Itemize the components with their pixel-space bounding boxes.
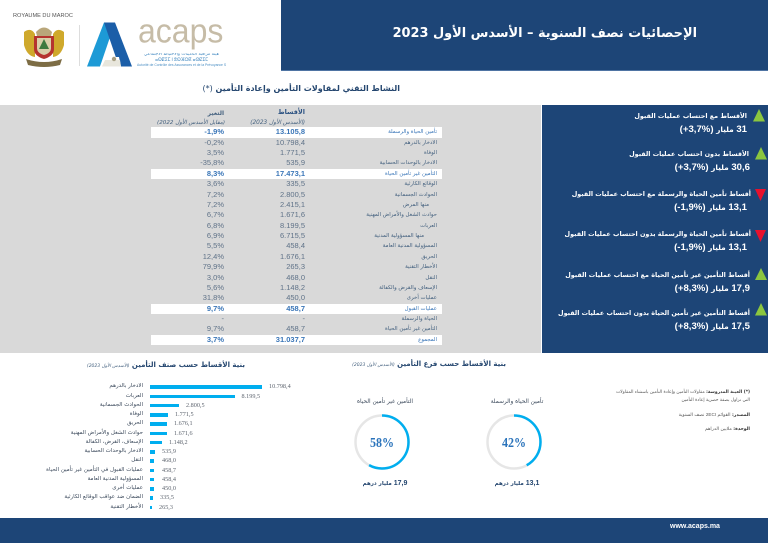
row: vehicles: 8.199,5 [280, 221, 305, 230]
bar: vehicles: العربات [126, 393, 143, 399]
row: life acceptances [222, 314, 437, 323]
bar: vehicles [0, 392, 300, 401]
key figure 5 text: أقساط التأمين غير تأمين الحياة مع احتساب عمليات القبول [565, 271, 750, 279]
key figure 2 text: الأقساط بدون احتساب عمليات القبول [629, 150, 749, 158]
note: sample: (*) العينة المدروسة: مقاولات التأمين وإعادة التأمين باستثناء المقاولات التي تزاول بصفة حصرية إعادة التأمين [616, 390, 750, 402]
row: other [203, 293, 437, 302]
key figure 5 value: 17,9 مليار (+8,3%) [675, 283, 750, 294]
bar: transport: النقل [131, 457, 143, 463]
row: acceptances: 9,7% [207, 304, 224, 313]
icon: royal emblem [24, 28, 64, 67]
key figure 1 [634, 109, 765, 135]
row: bodily accidents: 7,2% [207, 190, 224, 199]
row: death: الوفاة [424, 150, 437, 156]
row: of which illness: 2.415,1 [280, 200, 305, 209]
row: catastrophe: 335,5 [286, 179, 305, 188]
bar: bodily accidents: الحوادث الجسمانية [100, 402, 143, 408]
row: work accidents: حوادث الشغل والأمراض المهنية [366, 212, 437, 218]
bar: dirham savings: 10.798,4 [269, 383, 291, 390]
row: unit savings: -35,8% [200, 158, 224, 167]
row: assistance credit surety [207, 283, 437, 292]
donut value: life: 13,1 مليار درهم [495, 480, 539, 487]
key figure 2 [629, 147, 767, 173]
footer website: www.acaps.ma [670, 523, 720, 530]
row: life insurance: 13.105,8 [276, 127, 305, 136]
bar: assistance credit surety [0, 438, 300, 447]
row: total [0, 335, 541, 345]
row: life acceptances: - [302, 314, 305, 323]
bar: catastrophe: 335,5 [160, 494, 174, 501]
row: other: 450,0 [286, 293, 305, 302]
row: catastrophe: الوقائع الكارثية [404, 181, 437, 187]
row: of which illness: 7,2% [207, 200, 224, 209]
row: work accidents [207, 210, 437, 219]
row: catastrophe: 3,6% [207, 179, 224, 188]
bar: fire: 1.676,1 [174, 420, 193, 427]
row: non-life acceptances: 458,7 [286, 324, 305, 333]
icon: acaps logo A [87, 22, 132, 66]
row: non-life acceptances: التأمين غير تأمين الحياة [385, 326, 437, 332]
row: transport: 468,0 [286, 273, 305, 282]
bar: catastrophe: الضمان ضد عواقب الوقائع الكارثية [64, 494, 143, 500]
row: general liability: المسؤولية المدنية العامة [383, 243, 437, 249]
bar: other [0, 484, 300, 493]
note: unit: الوحدة: ملايين الدراهم [705, 426, 750, 432]
row: vehicles [207, 221, 437, 230]
row: other: عمليات أخرى [407, 295, 437, 301]
column header: change: التغير [208, 110, 224, 117]
row: vehicles: العربات [420, 223, 437, 229]
donut chart: life 42% [484, 412, 544, 472]
key figure 5 [565, 268, 767, 294]
bar: transport: 468,0 [162, 457, 176, 464]
bar: unit savings: الادخار بالوحدات الحسابية [84, 448, 143, 454]
key figure 3 [572, 189, 766, 213]
row: savings: -0,2% [204, 138, 224, 147]
bar: death: الوفاة [130, 411, 143, 417]
row: total: 31.037,7 [276, 335, 305, 344]
key figure 6 value: 17,5 مليار (+8,3%) [675, 321, 750, 332]
row: death [207, 148, 437, 157]
bar: catastrophe [0, 493, 300, 503]
column subheader: change period: (مقابل الأسدس الأول 2022) [157, 120, 225, 126]
row: life acceptances: - [222, 314, 224, 323]
bar: death [0, 410, 300, 419]
row: non-life: 17.473,1 [276, 169, 305, 178]
bar: other: عمليات أخرى [112, 485, 143, 491]
bar: general liability [0, 475, 300, 484]
row: life insurance: تأمين الحياة والرسملة [388, 129, 437, 135]
row: non-life acceptances: 9,7% [207, 324, 224, 333]
row: of which illness [207, 200, 429, 209]
row: technical risks: الأخطار التقنية [405, 264, 437, 270]
bar: death: 1.771,5 [175, 411, 194, 418]
row: bodily accidents: الحوادث الجسمانية [395, 192, 437, 198]
bar: transport [0, 456, 300, 466]
row: total: 3,7% [207, 335, 224, 344]
column subheader: premiums period: (الأسدس الأول 2023) [250, 120, 305, 126]
row: of which civil liability: منها المسؤولية المدنية [374, 233, 424, 239]
row: unit savings: الادخار بالوحدات الحسابية [380, 160, 437, 166]
icon: down arrow [755, 230, 766, 242]
row: fire: الحريق [421, 254, 437, 260]
bar: acceptances: 458,7 [162, 467, 176, 474]
row: acceptances: عمليات القبول [405, 306, 437, 312]
donut chart: non-life 58%: 58% [370, 436, 394, 451]
row: unit savings [200, 158, 437, 167]
row: assistance credit surety: 1.148,2 [280, 283, 305, 292]
header band [281, 0, 768, 71]
icon: up arrow [755, 268, 767, 280]
row: acceptances [0, 304, 541, 314]
row: unit savings: 535,9 [286, 158, 305, 167]
key figure 3 value: 13,1 مليار (-1,9%) [674, 202, 747, 213]
bar: fire [0, 419, 300, 429]
row: of which civil liability [207, 231, 424, 240]
bar: assistance credit surety: الإسعاف، القرض، الكفالة [86, 439, 143, 445]
row: transport: 3,0% [207, 273, 224, 282]
key figure 4 [564, 230, 766, 253]
row: of which illness: منها المرض [403, 202, 429, 208]
logo wordmark: acaps [138, 11, 223, 49]
bar: acceptances [0, 466, 300, 475]
row: of which civil liability: 6.715,5 [280, 231, 305, 240]
bar: technical risks: الأخطار التقنية [110, 504, 143, 510]
row: bodily accidents [207, 190, 437, 199]
row: savings [204, 138, 437, 147]
icon: up arrow [753, 109, 765, 122]
row: death: 1.771,5 [280, 148, 305, 157]
row: life insurance: -1,9% [204, 127, 224, 136]
panel: key figures [542, 105, 768, 353]
row: bodily accidents: 2.800,5 [280, 190, 305, 199]
bar: assistance credit surety: 1.148,2 [169, 439, 188, 446]
bar: work accidents: 1.671,6 [174, 430, 193, 437]
divider [78, 25, 80, 66]
row: technical risks: 79,9% [203, 262, 224, 271]
logo subtitle: ⴰⵙⵇⵉⵎ ⵏ ⵓⵙⴼⵔⴽ ⴰⵙⵇⵉⵎ [155, 56, 208, 62]
row: of which civil liability: 6,9% [207, 231, 224, 240]
footer band [0, 518, 768, 543]
row: work accidents: 1.671,6 [280, 210, 305, 219]
donut label: non-life: التأمين غير تأمين الحياة [357, 399, 413, 405]
kingdom label: ROYAUME DU MAROC [13, 13, 73, 19]
heading: structure by category: بنية الأقساط حسب صنف التأمين (الأسدس الأول 2023) [87, 361, 245, 369]
row: assistance credit surety: الإسعاف والقرض والكفالة [379, 285, 437, 291]
bar: dirham savings: الادخار بالدرهم [109, 383, 143, 389]
key figure 3 text: أقساط تأمين الحياة والرسملة مع احتساب عمليات القبول [572, 190, 751, 198]
row: fire: 1.676,1 [280, 252, 305, 261]
bar: vehicles: 8.199,5 [242, 393, 260, 400]
bar chart [0, 382, 300, 512]
bar: fire: الحريق [127, 420, 143, 426]
bar: acceptances: عمليات القبول في التأمين غير تأمين الحياة [46, 467, 143, 473]
donut chart: life 42%: 42% [502, 436, 526, 451]
donut chart: non-life 58% [352, 412, 412, 472]
row: catastrophe [207, 179, 437, 188]
row: general liability [207, 241, 437, 250]
row: general liability: 458,4 [286, 241, 305, 250]
row: non-life acceptances [207, 324, 437, 333]
icon: up arrow [755, 147, 767, 160]
icon: up arrow [755, 303, 767, 316]
row: work accidents: 6,7% [207, 210, 224, 219]
column header: premiums: الأقساط [278, 108, 305, 116]
bar: technical risks [0, 503, 300, 512]
row: savings: الادخار بالدرهم [404, 140, 437, 146]
donut label: life: تأمين الحياة والرسملة [491, 399, 543, 405]
row: life acceptances: الحياة والرسملة [402, 316, 437, 322]
key figure 4 text: أقساط تأمين الحياة والرسملة بدون احتساب عمليات القبول [565, 230, 751, 238]
row: non-life [0, 169, 541, 179]
row: technical risks [203, 262, 437, 271]
key figure 1 text: الأقساط مع احتساب عمليات القبول [634, 112, 747, 120]
row: other: 31,8% [203, 293, 224, 302]
bar: general liability: المسؤولية المدنية العامة [88, 476, 143, 482]
key figure 2 value: 30,6 مليار (+3,7%) [675, 162, 750, 173]
row: general liability: 5,5% [207, 241, 224, 250]
donut value: non-life: 17,9 مليار درهم [363, 480, 407, 487]
header title: الإحصائيات نصف السنوية – الأسدس الأول 2023 [393, 26, 697, 41]
bar: technical risks: 265,3 [159, 504, 173, 511]
bar: bodily accidents: 2.800,5 [186, 402, 205, 409]
key figure 6 [558, 303, 767, 332]
logo subtitle [137, 53, 226, 67]
bar: dirham savings [0, 382, 300, 392]
bar: bodily accidents [0, 401, 300, 410]
row: fire: 12,4% [203, 252, 224, 261]
row: total: المجموع [418, 337, 437, 343]
row: transport: النقل [425, 275, 437, 281]
row: savings: 10.798,4 [276, 138, 305, 147]
icon: down arrow [755, 189, 766, 201]
row: non-life: 8,3% [207, 169, 224, 178]
bar: general liability: 458,4 [162, 476, 176, 483]
key figure 4 value: 13,1 مليار (-1,9%) [674, 242, 747, 253]
bar: unit savings [0, 447, 300, 456]
row: vehicles: 6,8% [207, 221, 224, 230]
row: technical risks: 265,3 [286, 262, 305, 271]
bar: unit savings: 535,9 [162, 448, 176, 455]
panel: premiums table [0, 105, 541, 353]
bar: work accidents: حوادث الشغل والأمراض المهنية [71, 430, 143, 436]
row: fire [203, 252, 437, 261]
row: life insurance [0, 127, 541, 138]
key figure 1 value: 31 مليار (+3,7%) [680, 124, 747, 135]
row: acceptances: 458,7 [286, 304, 305, 313]
row: non-life: التأمين غير تأمين الحياة [385, 171, 437, 177]
key figure 6 text: أقساط التأمين غير تأمين الحياة بدون احتساب عمليات القبول [558, 309, 750, 317]
row: assistance credit surety: 5,6% [207, 283, 224, 292]
row: death: 3,5% [207, 148, 224, 157]
heading: structure by branch: بنية الأقساط حسب فرع التأمين (الأسدس الأول 2023) [352, 360, 506, 368]
row: transport [207, 273, 437, 282]
bar: other: 450,0 [162, 485, 176, 492]
note: source: المصدر: القوائم 2ECI نصف السنوية [679, 412, 750, 418]
section title: technical activity: النشاط التقني لمقاولات التأمين وإعادة التأمين (*) [202, 84, 400, 93]
bar: work accidents [0, 429, 300, 438]
